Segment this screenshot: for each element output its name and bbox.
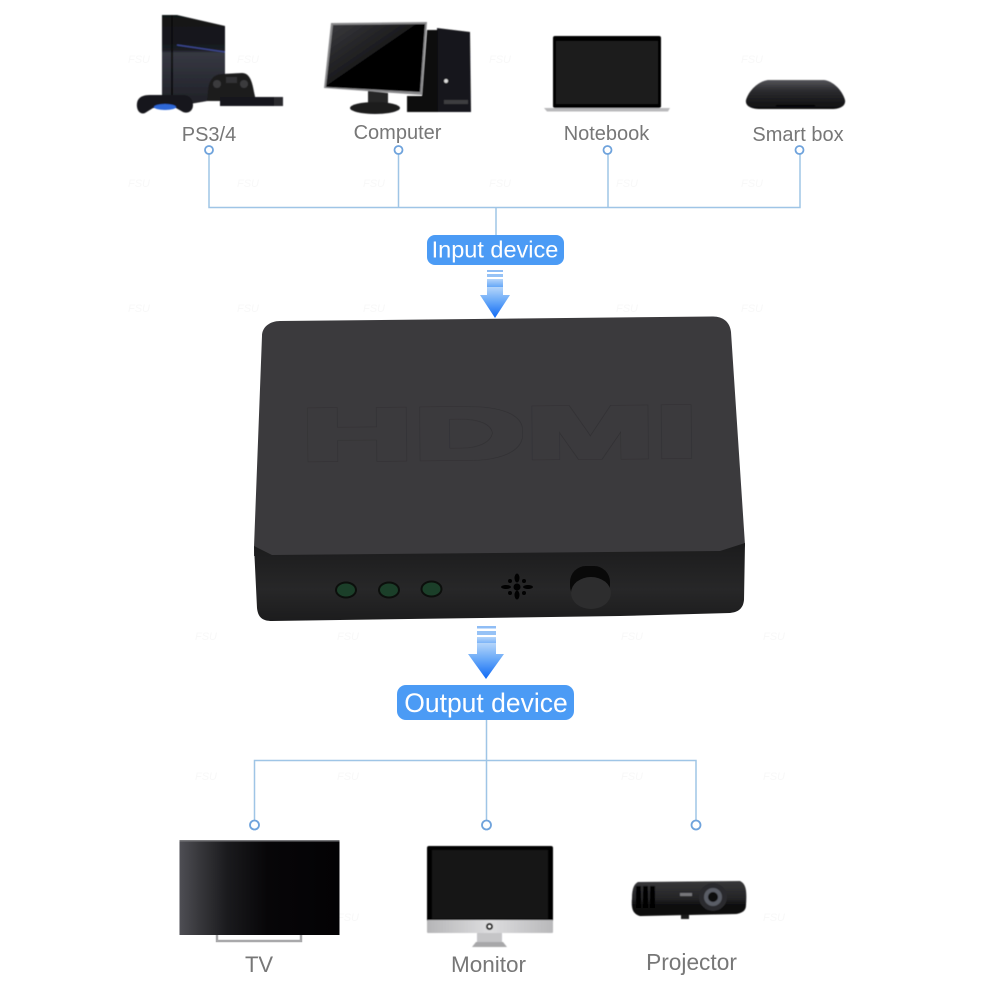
output connector lines bbox=[254, 720, 696, 820]
watermarks: FSU bbox=[616, 303, 638, 315]
watermarks: FSU bbox=[621, 771, 643, 783]
watermarks: FSU bbox=[128, 54, 150, 66]
watermarks: FSU bbox=[616, 178, 638, 190]
watermarks: FSU bbox=[489, 54, 511, 66]
output connector nodes bbox=[250, 820, 700, 830]
watermarks: FSU bbox=[337, 631, 359, 643]
icon: notebook bbox=[544, 36, 670, 112]
device top face bbox=[254, 316, 745, 556]
label: Computer: Computer bbox=[354, 122, 442, 144]
arrow: input to switch bbox=[480, 270, 510, 318]
watermarks: FSU bbox=[616, 54, 638, 66]
watermarks: FSU bbox=[237, 54, 259, 66]
watermarks: FSU bbox=[237, 303, 259, 315]
HDMI switch device bbox=[254, 316, 745, 621]
watermarks bbox=[128, 54, 785, 924]
label: Notebook: Notebook bbox=[564, 123, 650, 145]
input connector nodes bbox=[205, 146, 804, 154]
watermarks: FSU bbox=[741, 303, 763, 315]
input connector lines bbox=[209, 154, 800, 236]
arrow: switch to output bbox=[468, 626, 504, 679]
watermarks: FSU bbox=[337, 912, 359, 924]
icon: smart box bbox=[746, 80, 845, 109]
selector button bbox=[570, 566, 611, 609]
label: Monitor: Monitor bbox=[451, 952, 527, 977]
icon: PS4 console and controllers bbox=[137, 15, 283, 113]
badge: Output device: Output device bbox=[404, 688, 568, 718]
HDMI embossed logo: HDMI bbox=[301, 392, 698, 476]
label: Smart box: Smart box bbox=[752, 124, 844, 146]
watermarks: FSU bbox=[741, 54, 763, 66]
label: PS3/4: PS3/4 bbox=[182, 124, 236, 146]
icon: desktop computer bbox=[324, 22, 471, 114]
LED indicators bbox=[336, 582, 442, 598]
watermarks: FSU bbox=[763, 912, 785, 924]
watermarks: FSU bbox=[128, 303, 150, 315]
icon: TV bbox=[180, 840, 340, 941]
watermarks: FSU bbox=[363, 54, 385, 66]
icon: switch symbol bbox=[501, 574, 533, 600]
watermarks: FSU bbox=[237, 178, 259, 190]
watermarks: FSU bbox=[489, 178, 511, 190]
device front face bbox=[254, 543, 745, 621]
watermarks: FSU bbox=[363, 178, 385, 190]
watermarks: FSU bbox=[763, 771, 785, 783]
watermarks: FSU bbox=[195, 631, 217, 643]
watermarks: FSU bbox=[363, 303, 385, 315]
watermarks: FSU bbox=[763, 631, 785, 643]
watermarks: FSU bbox=[195, 771, 217, 783]
watermarks: FSU bbox=[128, 178, 150, 190]
label: TV: TV bbox=[245, 952, 273, 977]
icon: projector bbox=[632, 881, 746, 919]
watermarks: FSU bbox=[741, 178, 763, 190]
icon: monitor bbox=[427, 846, 553, 947]
watermarks: FSU bbox=[621, 631, 643, 643]
badge: Input device: Input device bbox=[432, 236, 558, 262]
label: Projector: Projector bbox=[646, 949, 737, 975]
watermarks: FSU bbox=[337, 771, 359, 783]
